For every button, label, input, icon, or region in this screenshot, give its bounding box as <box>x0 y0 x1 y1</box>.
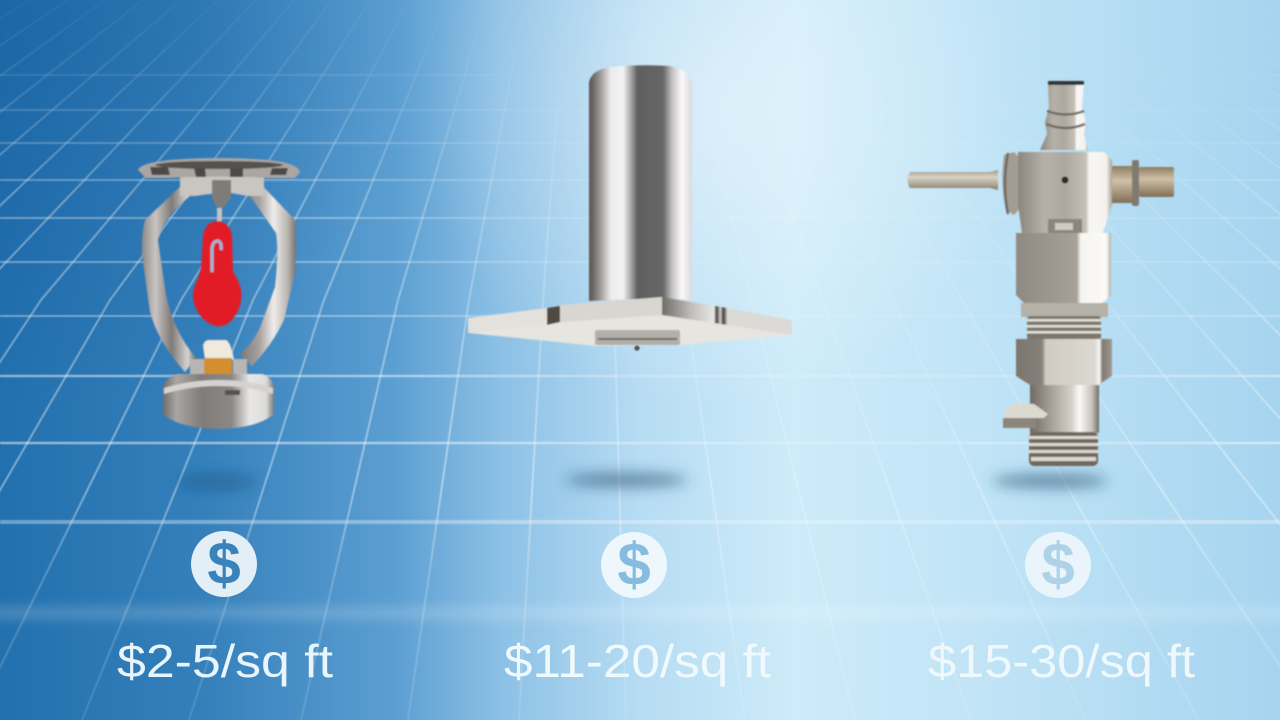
valve side tab <box>1003 403 1048 428</box>
column 1: cost label: $2-5/sq ft <box>117 635 333 687</box>
column 3: cost label: $15-30/sq ft <box>928 635 1195 687</box>
valve left collar <box>1002 152 1032 215</box>
shadow: valve <box>992 474 1108 488</box>
product: dry pipe valve <box>908 81 1174 466</box>
valve bottom thread <box>1029 432 1098 466</box>
valve lower hex nut <box>1016 339 1112 385</box>
valve middle thread <box>1027 316 1101 340</box>
shadow: concealed nozzle <box>564 473 688 487</box>
blurred light band near the floor front <box>0 606 1280 620</box>
sprinkler frame left arm <box>142 180 196 372</box>
shadow: sprinkler <box>177 475 257 489</box>
product: concealed vertical nozzle <box>468 65 792 351</box>
nozzle plate right wall <box>662 297 727 325</box>
sprinkler seat <box>203 340 234 376</box>
column 2: cost icon: $ <box>617 531 651 598</box>
column 2: cost label: $11-20/sq ft <box>504 635 771 687</box>
sprinkler deflector <box>138 158 300 221</box>
nozzle plate underside <box>468 315 792 346</box>
valve upper hex nut <box>1016 233 1111 303</box>
nozzle plate dark corner <box>547 306 560 325</box>
nozzle plate front band <box>560 297 662 322</box>
nozzle cylinder <box>589 65 692 301</box>
column 3: cost icon <box>1025 531 1091 598</box>
nozzle deflector tab <box>595 330 680 351</box>
valve lower body <box>1030 385 1099 433</box>
valve body <box>1018 152 1112 233</box>
column 1: cost icon <box>191 530 257 597</box>
column 1: cost icon: $ <box>207 530 241 597</box>
valve top barb <box>1040 81 1088 150</box>
column 2: cost icon <box>601 531 667 598</box>
valve left rod <box>908 170 998 190</box>
sprinkler yoke bar <box>180 176 264 196</box>
valve neck <box>1021 303 1108 317</box>
nozzle plate right wing <box>727 308 792 335</box>
sprinkler frame right arm <box>240 180 296 366</box>
valve right fitting <box>1110 160 1174 206</box>
nozzle plate left wing <box>468 308 547 333</box>
column 3: cost icon: $ <box>1041 531 1075 598</box>
product: standard sprinkler head <box>138 158 300 429</box>
red glass bulb trigger <box>193 221 241 326</box>
sprinkler threaded base <box>163 359 274 429</box>
